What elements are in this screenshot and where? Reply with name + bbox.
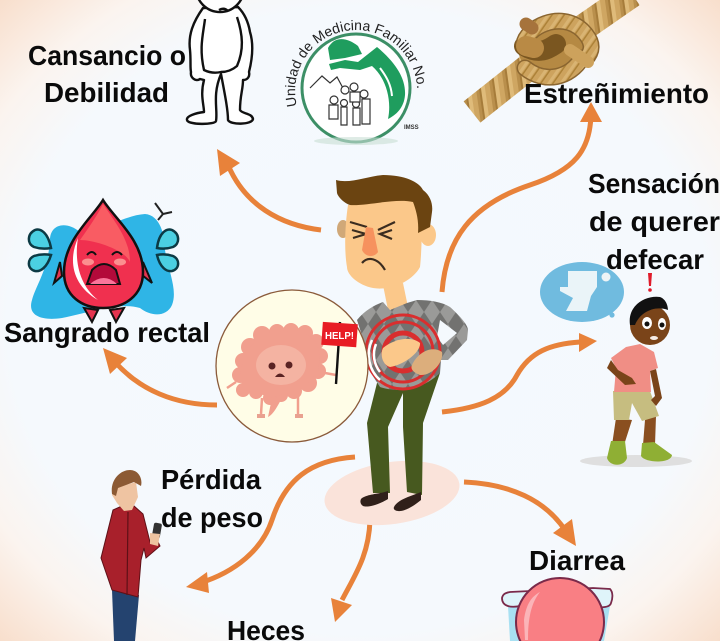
icon: tired figure [187, 0, 253, 124]
pain rings [366, 315, 440, 389]
logo: Unidad de Medicina Familiar [285, 20, 424, 145]
icon: toilet with pink ball [502, 578, 612, 641]
hair [112, 470, 141, 496]
heading: Sangrado rectal: Sangrado rectal [4, 317, 210, 348]
icon: crying blood drop [29, 200, 178, 322]
heading: Sensación de querer defecar [588, 168, 720, 275]
arrow: to cansancio [217, 149, 321, 230]
arrow: to diarrea [464, 482, 576, 546]
heading: Cansancio o Debilidad: Cansancio o [28, 40, 186, 71]
heading: Pérdida de peso: Pérdida [161, 464, 261, 495]
shoes [607, 441, 672, 465]
heading: Diarrea: Diarrea [529, 545, 625, 576]
heading: Estreñimiento: Estreñimiento [524, 78, 709, 109]
heading: Cansancio o Debilidad [28, 40, 186, 108]
face [268, 362, 292, 377]
shoes [360, 491, 421, 511]
floor shadow [320, 453, 464, 533]
heading: Sensación de querer defecar: defecar [606, 244, 704, 275]
arrow: to pérdida [186, 457, 355, 593]
exclamation [648, 273, 652, 286]
heading: Pérdida de peso: de peso [161, 502, 263, 533]
head [345, 200, 422, 289]
torso [357, 300, 468, 390]
character: man in pain [320, 175, 468, 533]
ear [337, 220, 349, 238]
legs [612, 416, 656, 445]
head [112, 482, 138, 511]
icon: toilet thought bubble [540, 262, 624, 322]
arrow: to sangrado [103, 348, 217, 405]
panel: intestine circle [216, 290, 368, 442]
jeans [112, 590, 139, 641]
hair [336, 175, 432, 233]
arrow: to sensación [442, 333, 597, 412]
icon: rope knot [472, 0, 632, 112]
icon: family [310, 76, 370, 125]
heading: Sensación de querer defecar: de querer [589, 206, 720, 237]
limbs [227, 373, 336, 416]
logo: Unidad de Medicina Familiar: IMSS [404, 125, 419, 131]
head [630, 305, 670, 345]
logo text [295, 30, 417, 106]
panel: intestine circle: HELP! [325, 330, 354, 342]
character: boy [580, 273, 692, 467]
shirt [101, 506, 160, 597]
character: thin man with phone [101, 470, 162, 641]
arrow: to heces [331, 520, 370, 622]
hand and phone [152, 522, 162, 539]
nose [362, 227, 378, 256]
arrow: to estreñimiento [442, 102, 602, 292]
shirt [611, 344, 658, 392]
shorts [613, 391, 659, 421]
intestine [232, 323, 328, 417]
heading: Pérdida de peso [161, 464, 263, 533]
legs [367, 373, 440, 495]
icon: eagle [328, 39, 405, 119]
neck [383, 283, 408, 310]
heading: Cansancio o Debilidad: Debilidad [44, 77, 169, 108]
face [350, 222, 395, 270]
sign: HELP [336, 322, 340, 384]
arms [607, 360, 662, 406]
hands [382, 339, 420, 367]
